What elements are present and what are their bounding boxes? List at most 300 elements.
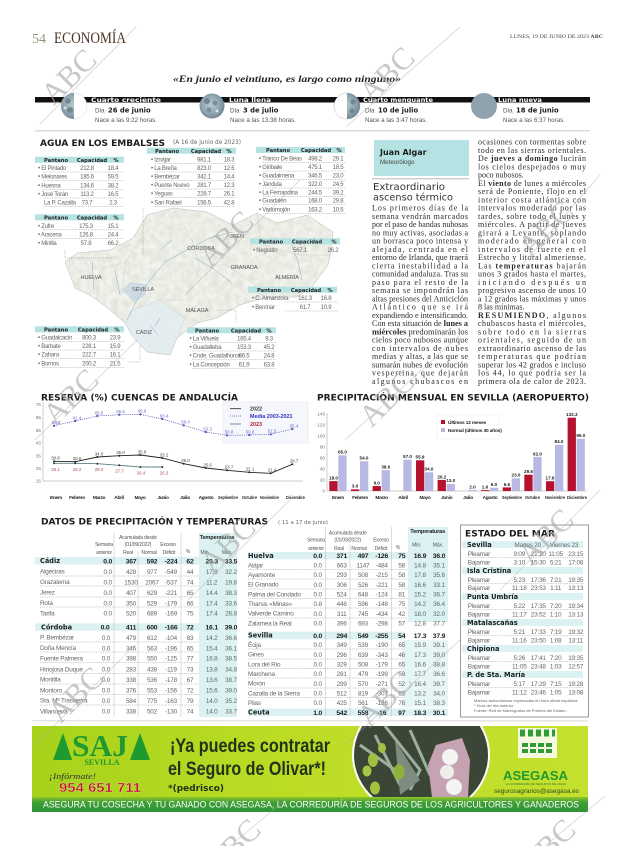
- group: Sevilla: 38.8: [433, 662, 445, 668]
- group: Sevilla: 15.1: [414, 700, 426, 707]
- table: Negratín: 26.2: [328, 248, 339, 254]
- group: Cádiz: -224: [165, 558, 178, 565]
- group: Cádiz: 17.3: [206, 569, 218, 576]
- table: Almanzora Benínar: Pantano: [257, 288, 281, 294]
- group: Huelva: 0.0: [313, 553, 323, 560]
- table: Tranco de Beas y otros: 24.5: [333, 182, 344, 188]
- station: Isla Cristina: Pleamar: [468, 577, 491, 584]
- table: Almanzora Benínar: • Benínar: [252, 305, 275, 311]
- author box: [374, 140, 469, 176]
- month labels: Junio: [441, 495, 453, 501]
- article column 1: paso para el resto de la: [372, 278, 468, 287]
- ABC watermarks: ABC: [511, 502, 580, 571]
- group: Huelva: 371: [336, 553, 347, 560]
- month labels: Abril: [114, 495, 124, 501]
- column headers: Normal: [351, 546, 367, 552]
- heading: datos de precipitación y temperaturas: DATOS DE PRECIPITACIÓN Y TEMPERATURAS: [41, 516, 268, 528]
- phase: luna nueva: Nace a las 6:37 horas.: [503, 117, 565, 124]
- station: Sevilla: 15:30: [531, 559, 546, 566]
- article column 1: sumarán nubes de evolución: [372, 360, 468, 369]
- column headers: Real: [334, 546, 344, 552]
- map labels: JAÉN: [230, 233, 244, 240]
- group: Córdoba: 36.6: [225, 635, 237, 642]
- month labels: Mayo: [134, 495, 146, 501]
- group: Sevilla: 0.0: [314, 700, 322, 707]
- group: Córdoba: [40, 624, 238, 716]
- group: Córdoba: 338: [126, 677, 137, 684]
- group: Huelva: 306: [337, 582, 347, 589]
- heading: datos de precipitación y temperaturas: [41, 516, 328, 528]
- group: Córdoba: 74: [187, 709, 194, 716]
- table: Tranco de Beas y otros: • Guadalén: [259, 199, 286, 205]
- map labels: CÁDIZ: [136, 329, 153, 336]
- article column 2: temperaturas que podrían: [478, 352, 586, 361]
- table: Tranco de Beas y otros: 244.5: [308, 190, 323, 196]
- group: Huelva: 16.9: [414, 553, 427, 560]
- group: Huelva: Palma del Condado: [248, 591, 301, 598]
- map labels: ALMERÍA: [275, 274, 299, 281]
- row: Ceuta: 97: [398, 710, 406, 717]
- group: Cádiz: -221: [165, 590, 178, 597]
- station: Chipiona: [462, 645, 584, 670]
- group: Huelva: 0.0: [314, 620, 322, 628]
- y axis: [36, 402, 303, 484]
- group: Huelva: -221: [376, 582, 388, 589]
- table: Guadalcacín y otros: 21.5: [110, 361, 121, 367]
- group: Cádiz: Cádiz: [40, 557, 60, 565]
- station: Punta Umbría: 23:52: [531, 611, 546, 618]
- legend: Últimos 12 meses: [448, 419, 487, 426]
- table: Iznájar y otros: Pantano: [155, 149, 179, 155]
- table: Tranco de Beas y otros: 39.2: [333, 190, 344, 196]
- table: Tranco de Beas y otros: • Vadomojón: [259, 208, 290, 214]
- ASAJA logo: SAJ: [72, 728, 128, 763]
- group: Sevilla: Lora del Río: [248, 661, 281, 668]
- group: Córdoba: 13.8: [206, 667, 218, 674]
- column headers: Déficit: [375, 546, 388, 552]
- group: Sevilla: 0.0: [314, 690, 322, 698]
- table: Zufre Aracena Minilla: 175.3: [79, 224, 94, 230]
- table: Guadalcacín y otros: • Barbate: [38, 344, 61, 350]
- group: Sevilla: 0.0: [313, 633, 323, 640]
- group: Sevilla: -307: [376, 690, 388, 698]
- group: Cádiz: 0.0: [104, 569, 112, 576]
- bar value labels: 9.0: [374, 480, 380, 486]
- group: Sevilla: 17.7: [414, 671, 426, 678]
- group: Huelva: 58: [398, 562, 406, 570]
- y axis: 20: [320, 478, 325, 482]
- group: Sevilla: 76: [398, 700, 406, 707]
- group: Sevilla: -343: [376, 652, 388, 659]
- month labels: Febrero: [69, 495, 85, 501]
- group: Huelva: 448: [337, 601, 347, 608]
- table: embalses Guadiana norte: Capacidad: [77, 158, 107, 164]
- group: Huelva: Ayamonte: [248, 572, 276, 579]
- group: Cádiz: 33.6: [225, 600, 237, 607]
- legend: Media 2003-2021: [250, 414, 293, 420]
- y axis: 35: [36, 453, 41, 458]
- article column 2: 8 las mínimas.: [478, 302, 524, 312]
- phase: luna llena: Día: [230, 108, 240, 114]
- group: Córdoba: Hinojosa Duque: [40, 666, 83, 673]
- y axis: 65: [36, 415, 41, 420]
- article column 2: los 44, lo que podría ser la: [478, 368, 586, 378]
- series: media 2003-2021: 66.9: [138, 409, 147, 414]
- group: Sevilla: 46: [398, 652, 406, 659]
- group: Sevilla: 819: [358, 690, 369, 698]
- bar value labels: 95.0: [576, 433, 586, 438]
- group: Cádiz: 407: [126, 590, 137, 597]
- bottom slogan band: ASEGURA TU COSECHA Y TU GANADO CON ASEGASA, LA CORREDURÍA DE SEGUROS DE LOS AGRICULTORES Y GANADEROS: [43, 800, 579, 810]
- month labels: Noviembre: [260, 495, 279, 501]
- group: Huelva: [248, 552, 446, 628]
- table: Iznájar y otros: • Puente Nuevo: [151, 183, 190, 189]
- ABC watermarks: ABC: [191, 204, 260, 273]
- table: La Viñuela y otros: 165.4: [237, 336, 252, 342]
- bar value labels: 62.0: [533, 451, 542, 456]
- article column 1: expandiendo e intensificando.: [372, 311, 468, 320]
- group: Córdoba: 550: [147, 656, 158, 663]
- station: Chipiona: 19:35: [568, 655, 584, 662]
- column headers: Máx.: [222, 550, 232, 556]
- row: Ceuta: [248, 708, 446, 717]
- table: Zufre Aracena Minilla: 126.8: [79, 233, 94, 239]
- group: Huelva: 33.1: [433, 582, 445, 589]
- table: Guadalcacín y otros: • Bornos: [38, 361, 59, 367]
- tide footnote: * Hora del día anterior.: [474, 703, 514, 708]
- table: Guadalcacín y otros: 15.9: [110, 344, 121, 350]
- station: Chipiona: 11:05: [512, 663, 527, 670]
- table: embalses Guadiana norte: 73.7: [82, 200, 93, 206]
- column headers: %: [186, 549, 191, 555]
- group: Córdoba: 13.6: [206, 677, 218, 684]
- station: P. de Sta. María: P. de Sta. María: [467, 671, 525, 679]
- group: Sevilla: 36.6: [433, 671, 445, 678]
- group: Sevilla: 0.0: [314, 681, 322, 688]
- group: Córdoba: 0.0: [102, 667, 111, 674]
- group: Huelva: 35.1: [433, 562, 445, 570]
- series: media 2003-2021: 58.4: [181, 420, 190, 425]
- bar value labels: 1.6: [482, 484, 489, 490]
- series: media 2003-2021: [52, 409, 299, 436]
- article column 1: alejada, centrada en el: [372, 245, 469, 254]
- group: Huelva: -148: [376, 601, 388, 608]
- column headers: Exceso: [373, 537, 389, 543]
- station: P. de Sta. María: 23:46: [531, 689, 546, 696]
- y axis: 15: [36, 479, 41, 484]
- group: Córdoba: 38.5: [225, 656, 237, 663]
- table: Zufre Aracena Minilla: 15.1: [108, 224, 119, 230]
- table: Iznájar y otros: • Bembézar: [151, 174, 180, 180]
- heading: agua en los embalses: [40, 139, 241, 149]
- series: 2023: 29.2: [73, 467, 82, 472]
- column headers: Real: [123, 550, 133, 556]
- column headers: (01/09/2022): [125, 542, 152, 548]
- y axis: 60: [320, 456, 325, 460]
- station: Isla Cristina: 23:53: [531, 585, 546, 592]
- article column 1: entorno de Irlanda, que traerá: [372, 253, 468, 262]
- group: Huelva: 524: [337, 592, 347, 598]
- bar value labels: 3.0: [352, 484, 359, 489]
- table: La Viñuela y otros: • La Concepción: [190, 362, 230, 368]
- group: Córdoba: 67: [187, 677, 194, 684]
- table: Guadalcacín y otros: • Zahara: [38, 353, 60, 359]
- group: Sevilla: 17.3: [414, 652, 426, 659]
- group: Huelva: 293: [337, 572, 347, 579]
- group: Huelva: 596: [358, 601, 369, 608]
- group: Sevilla: 39.7: [433, 681, 445, 688]
- group: Córdoba: -196: [165, 645, 178, 652]
- group: Córdoba: 34.8: [225, 667, 237, 674]
- table: embalses Guadiana norte: La P. Cazalla: [44, 200, 77, 206]
- series: 2022: [51, 449, 299, 474]
- table: Almanzora Benínar: Capacidad: [291, 288, 321, 294]
- group: Cádiz: 0.0: [104, 611, 112, 618]
- bar value labels: 55.9: [416, 455, 425, 460]
- group: Cádiz: 74: [187, 579, 194, 586]
- legend: 2022: [250, 406, 262, 412]
- station: Sevilla: Viernes 23: [550, 542, 579, 549]
- group: Sevilla: Pilas: [248, 700, 261, 707]
- series: 2022: 30.6: [73, 456, 82, 461]
- article column 2: interior costa atlántica con: [478, 195, 586, 204]
- column headers: Temperaturas: [410, 529, 445, 535]
- table: La Viñuela y otros: 61.9: [239, 362, 250, 368]
- station: Isla Cristina: 7:21: [550, 577, 562, 584]
- station: Matalascañas: 23:50: [531, 637, 546, 644]
- table: Tranco de Beas y otros: 475.1: [308, 165, 323, 171]
- group: Córdoba: -178: [165, 677, 178, 684]
- ABC watermarks: ABC: [511, 194, 580, 263]
- group: Córdoba: 38.7: [225, 677, 237, 684]
- station: Sevilla: 11:05: [548, 551, 564, 558]
- table: embalses Guadiana norte: 212.8: [80, 166, 95, 172]
- table: Iznájar y otros: [147, 148, 236, 206]
- station: Punta Umbría: 13:13: [568, 611, 584, 618]
- table: Iznájar y otros: %: [226, 149, 232, 155]
- article column 1: Los primeros días de la: [372, 204, 468, 212]
- group: Córdoba: 584: [126, 698, 137, 705]
- series: media 2003-2021: 50.8: [225, 430, 234, 435]
- group: Sevilla: 63: [398, 690, 406, 698]
- series: media 2003-2021: 53.3: [203, 426, 212, 431]
- column headers: Mín.: [412, 542, 421, 548]
- asegasa logo: segurosagrarios@asegasa.es: [494, 788, 580, 795]
- station: Matalascañas: Pleamar: [468, 629, 491, 636]
- month labels: Diciembre: [286, 495, 305, 501]
- legend: [437, 415, 502, 439]
- month labels: Marzo: [375, 495, 388, 501]
- article column 1: algunos chubascos en: [372, 377, 468, 386]
- article headline: Extraordinario: [373, 182, 445, 193]
- station: Chipiona: 23:48: [531, 663, 546, 670]
- group: Córdoba: 39.0: [225, 688, 237, 695]
- group: Huelva: 57: [398, 620, 406, 628]
- table: Iznájar y otros: 12.6: [224, 166, 235, 172]
- bar value labels: 6.0: [491, 482, 498, 487]
- group: Cádiz: 26.8: [225, 611, 237, 618]
- station: Matalascañas: Matalascañas: [467, 619, 518, 627]
- phase: luna llena: 3 de julio: [243, 106, 279, 114]
- group: Cádiz: 0.0: [104, 600, 112, 607]
- bar value labels: 54.0: [360, 456, 369, 461]
- group: Córdoba: 14.2: [206, 635, 218, 642]
- column headers: Acumulada desde: [119, 535, 157, 541]
- phase: cuarto creciente: 26 de junio: [108, 106, 151, 114]
- table: Iznájar y otros: Capacidad: [191, 149, 221, 155]
- series: media 2003-2021: 51.5: [268, 429, 277, 434]
- y axis: [317, 412, 587, 494]
- group: Huelva: 396: [337, 620, 347, 628]
- group: Córdoba: -125: [165, 656, 178, 663]
- y axis: 0: [322, 488, 325, 494]
- table: Guadalcacín y otros: 800.3: [82, 335, 97, 341]
- station: Punta Umbría: Bajamar: [468, 611, 491, 618]
- table: embalses Guadiana norte: 59.5: [108, 175, 119, 181]
- group: Huelva: Tharsis «Minas»: [248, 601, 293, 608]
- phase: luna llena: [200, 94, 296, 124]
- series: media 2003-2021: 65.5: [95, 410, 104, 415]
- bottom slogan band: [32, 797, 588, 812]
- table: Iznájar y otros: 342.1: [197, 174, 212, 180]
- group: Córdoba: 33.7: [225, 709, 237, 716]
- table: La Viñuela y otros: %: [266, 328, 272, 334]
- asegasa logo: [494, 728, 580, 795]
- station: Matalascañas: 1:08: [550, 637, 562, 644]
- table: La Viñuela y otros: • Cnde. Guadalhorce: [190, 354, 241, 360]
- article column 2: todo en las sierras orientales.: [478, 146, 586, 155]
- group: Cádiz: 33.5: [225, 558, 238, 565]
- series: 2022: 35.8: [138, 449, 147, 454]
- table: Zufre Aracena Minilla: Pantano: [44, 215, 68, 221]
- group: Huelva: 42: [398, 611, 406, 618]
- group: Córdoba: -166: [165, 624, 178, 632]
- table: Tranco de Beas y otros: 23.0: [333, 173, 344, 179]
- station: Isla Cristina: 11:18: [512, 585, 527, 592]
- table: Tranco de Beas y otros: 163.2: [308, 208, 323, 214]
- y axis: 40: [320, 466, 325, 472]
- series: 2023: 26.3: [160, 470, 169, 476]
- table: Negratín: %: [331, 239, 337, 245]
- group: Cádiz: Algeciras: [40, 569, 64, 576]
- series: 2022: 23.7: [225, 465, 234, 470]
- group: Huelva: 58: [398, 582, 406, 589]
- group: Cádiz: 0.0: [104, 579, 112, 586]
- group: Sevilla: 15.9: [414, 642, 426, 649]
- month labels: Agosto: [483, 495, 498, 501]
- group: Córdoba: Córdoba: [41, 624, 72, 632]
- group: Sevilla: 425: [337, 700, 347, 707]
- page header: [32, 30, 603, 47]
- group: Córdoba: Montoro: [40, 687, 63, 694]
- group: Córdoba: 16.8: [206, 656, 218, 663]
- group: Cádiz: 529: [147, 600, 158, 607]
- page number: 54: [32, 32, 46, 47]
- row: Ceuta: 1.0: [313, 710, 323, 717]
- series: 2023: [51, 462, 169, 476]
- article column 2: los cielos despejados o muy: [478, 162, 586, 171]
- table: Guadalcacín y otros: 222.7: [82, 353, 97, 359]
- group: Huelva: -215: [376, 572, 388, 579]
- group: Huelva: 0.0: [314, 572, 322, 579]
- column headers: anterior: [308, 546, 324, 552]
- line chart: reserva: [36, 402, 308, 501]
- heading: agua en los embalses: AGUA EN LOS EMBALSES: [40, 139, 165, 149]
- group: Huelva: 36.0: [433, 553, 446, 560]
- table: embalses Guadiana norte: 16.5: [108, 192, 119, 198]
- month labels: Octubre: [525, 495, 540, 501]
- month labels: Enero: [332, 495, 344, 501]
- group: Huelva: -126: [375, 553, 389, 560]
- series: 2022: 28.7: [290, 459, 299, 464]
- article column 2: Estrecho y litoral almeriense.: [478, 253, 586, 262]
- group: Sevilla: Sevilla: [248, 632, 273, 640]
- ABC watermarks: ABC: [41, 660, 110, 729]
- table: Iznájar y otros: 823.0: [197, 166, 212, 172]
- series: 2023: 27.7: [115, 468, 124, 474]
- group: Córdoba: 35.2: [225, 698, 237, 705]
- y axis: 55: [36, 428, 41, 433]
- article column 2: ocasiones con tormentas sobre: [478, 138, 586, 146]
- table: La Viñuela y otros: • Guadalteba: [190, 345, 222, 351]
- tide footnote: Mareas astronómicas expresadas en hora oficial española.: [474, 698, 579, 703]
- series: 2023: 29.1: [51, 467, 60, 472]
- group: Cádiz: 0.0: [103, 558, 113, 565]
- group: Córdoba: 553: [147, 688, 158, 695]
- group: Córdoba: 73: [187, 667, 194, 674]
- station: Sevilla: Sevilla: [467, 541, 492, 549]
- station: P. de Sta. María: 11:12: [512, 689, 527, 696]
- table: embalses Guadiana norte: 18.4: [108, 166, 119, 172]
- table: Tranco de Beas y otros: 322.0: [308, 182, 323, 188]
- table: Almanzora Benínar: 10.9: [321, 305, 332, 311]
- month labels: Octubre: [242, 495, 257, 501]
- heading: reserva cuencas: RESERVA (%) CUENCAS DE ANDALUCÍA: [41, 392, 238, 404]
- group: Córdoba: 338: [126, 709, 137, 716]
- group: Cádiz: [40, 557, 238, 618]
- group: Cádiz: 977: [147, 569, 158, 576]
- phase: luna nueva: [471, 93, 565, 124]
- table: embalses Guadiana norte: • Melonares: [38, 175, 67, 181]
- phase: cuarto menguante: [334, 93, 433, 124]
- bar value labels: 2.0: [469, 484, 476, 489]
- group: Sevilla: -136: [376, 700, 388, 707]
- group: Sevilla: 0.0: [314, 671, 322, 678]
- station: P. de Sta. María: [462, 671, 584, 696]
- row: Ceuta: 558: [358, 710, 369, 717]
- bars: últimos 12 meses: [329, 418, 576, 491]
- station: Sevilla: 5:21: [550, 559, 562, 566]
- group: Cádiz: 14.4: [206, 590, 218, 597]
- table: Iznájar y otros: 12.3: [224, 183, 235, 189]
- station: P. de Sta. María: 5:17: [513, 681, 526, 688]
- phase: cuarto creciente: Día: [95, 108, 105, 114]
- article column 1: [372, 204, 469, 386]
- moon phases strip: [35, 93, 590, 124]
- group: Córdoba: 0.0: [102, 698, 111, 705]
- phase: cuarto creciente: Cuarto creciente: [91, 97, 161, 104]
- group: Huelva: 526: [358, 582, 369, 589]
- series: 2023: 26.4: [137, 470, 146, 476]
- ABC watermarks: ABC: [350, 664, 419, 733]
- group: Sevilla: Cazalla de la Sierra: [248, 690, 300, 697]
- group: Huelva: 693: [358, 620, 369, 628]
- article column 1: por el paso de bandas nubosas: [372, 220, 468, 229]
- group: Huelva: 0.0: [314, 592, 322, 598]
- phase: luna nueva: Luna nueva: [498, 97, 542, 104]
- group: Huelva: 75: [398, 553, 406, 560]
- table: Negratín: 567.1: [293, 248, 308, 254]
